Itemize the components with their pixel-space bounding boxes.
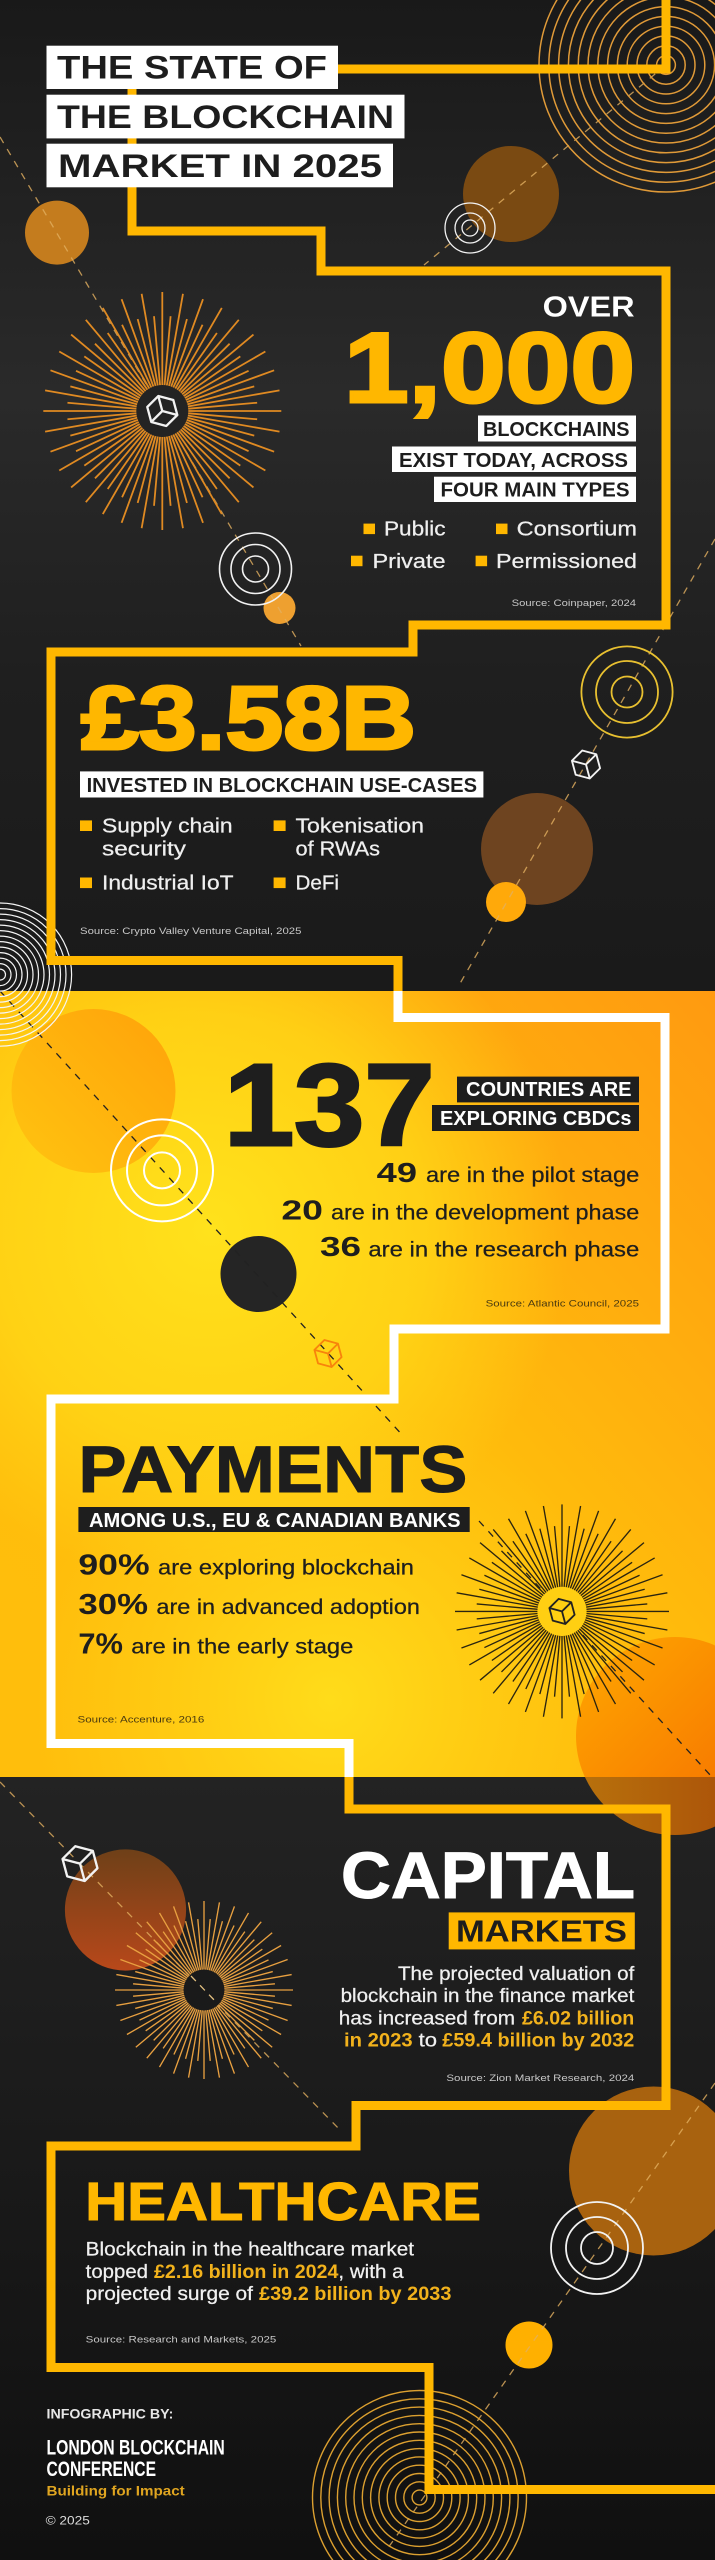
stats: CBDC stages: 20 [281, 1194, 323, 1225]
big number: £3.58B [81, 669, 416, 769]
paragraph: in 2023 [344, 2030, 413, 2052]
circle: brown bottom right [569, 2086, 715, 2256]
panel: CBDCs [224, 1040, 639, 1310]
heading: CAPITAL [341, 1839, 635, 1912]
white rings: left middle [220, 533, 292, 605]
stats: CBDC stages: are in the research phase [368, 1238, 639, 1262]
sunburst: top left with cube [35, 284, 290, 538]
stats: bank adoption: 30% [78, 1589, 148, 1621]
frame line: white, panels 3 and 4 [51, 991, 665, 1777]
label strips [392, 416, 636, 502]
circle: black in yellow section [220, 1236, 296, 1312]
list: blockchain types [351, 518, 637, 573]
panel: healthcare [85, 2172, 481, 2345]
big number: 1,000 [344, 312, 635, 423]
list: use cases: Supply chain [102, 816, 233, 838]
background: bottom dark section [0, 1777, 715, 2560]
paragraph [339, 1963, 635, 2052]
dashed diagonal: bottom left [0, 1782, 340, 2130]
white rings: top [445, 203, 495, 253]
background: top dark section [0, 0, 715, 991]
icon: cube in sunburst [145, 393, 179, 429]
paragraph: The projected valuation of [398, 1963, 635, 1985]
logo: London Blockchain Conference: LONDON BLOCKCHAIN [46, 2434, 225, 2460]
source: Source: Atlantic Council, 2025 [486, 1298, 639, 1310]
list: use cases [80, 816, 424, 895]
sunburst: payments [448, 1497, 676, 1726]
connector line: title to top right [338, 0, 666, 69]
heading: PAYMENTS [78, 1433, 467, 1506]
white rings: healthcare [551, 2202, 643, 2294]
white rings: yellow section [111, 1119, 213, 1221]
stats: CBDC stages: are in the pilot stage [426, 1164, 639, 1187]
circle: orange top left [25, 201, 89, 265]
source: Source: Research and Markets, 2025 [86, 2334, 276, 2345]
list: use cases: security [102, 838, 186, 860]
paragraph: £59.4 billion by 2032 [442, 2030, 634, 2052]
source: Source: Accenture, 2016 [78, 1715, 204, 1726]
panel: payments [78, 1433, 470, 1726]
label strips: BLOCKCHAINS [483, 419, 630, 441]
paragraph: projected surge of [86, 2283, 254, 2305]
list: blockchain types: Private [372, 551, 446, 573]
frame line: panels 1 and 2 [51, 89, 666, 991]
concentric rings: top right [539, 0, 715, 192]
label strips: COUNTRIES ARE [466, 1079, 632, 1101]
credit label: INFOGRAPHIC BY: [46, 2407, 173, 2422]
stats: bank adoption: are in advanced adoption [156, 1596, 420, 1619]
title: MARKET IN 2025 [58, 148, 382, 184]
source: Source: Crypto Valley Venture Capital, 2025 [80, 926, 301, 937]
dashed diagonal: bottom right [388, 2083, 715, 2548]
icon: black cube in sunburst [548, 1596, 576, 1627]
panel: over 1,000 blockchains [344, 291, 637, 609]
big number: 137 [224, 1040, 434, 1170]
stats: bank adoption [78, 1550, 420, 1660]
circle: small orange [264, 592, 296, 624]
list: blockchain types: Public [384, 518, 446, 540]
list: blockchain types: Permissioned [496, 551, 637, 573]
paragraph: £6.02 billion [522, 2008, 634, 2030]
icon: orange cube [313, 1337, 343, 1370]
dashed diagonal: top right [424, 65, 666, 265]
source: Source: Zion Market Research, 2024 [446, 2073, 634, 2084]
stats: bank adoption: are in the early stage [131, 1635, 353, 1658]
heading: HEALTHCARE [85, 2172, 481, 2232]
title [46, 46, 404, 187]
stats: bank adoption: are exploring blockchain [158, 1557, 414, 1580]
stats: CBDC stages: 49 [377, 1157, 417, 1188]
list: blockchain types: Consortium [517, 518, 637, 540]
paragraph [86, 2238, 452, 2305]
stats: CBDC stages: 36 [320, 1231, 361, 1262]
label strips [432, 1077, 639, 1131]
stats: CBDC stages [281, 1157, 639, 1262]
label strip: INVESTED IN BLOCKCHAIN USE-CASES [87, 775, 477, 797]
label strips: FOUR MAIN TYPES [440, 480, 630, 502]
list: use cases: Industrial IoT [102, 873, 234, 895]
white rings: left edge [0, 903, 72, 1046]
heading: over: OVER [543, 291, 635, 323]
paragraph: £2.16 billion in 2024 [154, 2261, 339, 2283]
list: use cases: Tokenisation [296, 816, 424, 838]
yellow rings: right [581, 646, 673, 738]
dashed diagonal: yellow section [0, 991, 711, 1776]
source: Source: Coinpaper, 2024 [512, 598, 636, 609]
footer: credits [46, 2407, 225, 2528]
stats: bank adoption: 7% [78, 1628, 123, 1660]
paragraph: topped [86, 2261, 148, 2283]
stats: CBDC stages: are in the development phase [331, 1201, 639, 1224]
circle: amber blob in yellow section [12, 1009, 176, 1173]
paragraph: blockchain in the finance market [341, 1985, 635, 2007]
list: use cases: of RWAs [296, 838, 380, 860]
panel: investment [80, 669, 483, 937]
title: THE STATE OF [57, 50, 327, 86]
concentric rings: bottom [312, 2390, 526, 2560]
circle: brown right of investment panel [481, 793, 593, 905]
dashed diagonal: top left [0, 137, 301, 646]
tagline: Building for Impact [46, 2482, 185, 2498]
title: THE BLOCKCHAIN [57, 99, 394, 135]
circle: brown-red bottom left [65, 1849, 186, 1971]
panel: capital markets [339, 1839, 635, 2084]
sunburst: capital markets [109, 1895, 299, 2085]
label strips: EXPLORING CBDCs [440, 1108, 632, 1130]
stats: bank adoption: 90% [78, 1550, 150, 1582]
frame line: panels 5 and 6 [51, 1777, 715, 2490]
paragraph: to [419, 2030, 437, 2052]
paragraph: Blockchain in the healthcare market [86, 2238, 415, 2260]
background: yellow section [0, 991, 715, 1777]
icon: white cube lower left [60, 1842, 100, 1885]
label strip: MARKETS [456, 1914, 627, 1949]
paragraph: has increased from [339, 2008, 515, 2030]
label strips: EXIST TODAY, ACROSS [399, 450, 628, 472]
logo: London Blockchain Conference [46, 2434, 225, 2481]
paragraph: £39.2 billion by 2033 [259, 2283, 452, 2305]
logo: London Blockchain Conference: CONFERENCE [46, 2456, 156, 2481]
circle: yellow bottom [506, 2322, 552, 2368]
icon: white cube on right line [570, 747, 602, 782]
list: use cases: DeFi [296, 873, 339, 895]
paragraph: , with a [338, 2261, 404, 2283]
circle: brown top [463, 146, 559, 242]
circle: big orange overlapping boundary [576, 1637, 715, 1835]
copyright: © 2025 [46, 2514, 90, 2528]
dashed diagonal: right side [458, 539, 715, 987]
circle: orange small right [486, 882, 526, 922]
label strip: AMONG U.S., EU & CANADIAN BANKS [89, 1510, 461, 1532]
